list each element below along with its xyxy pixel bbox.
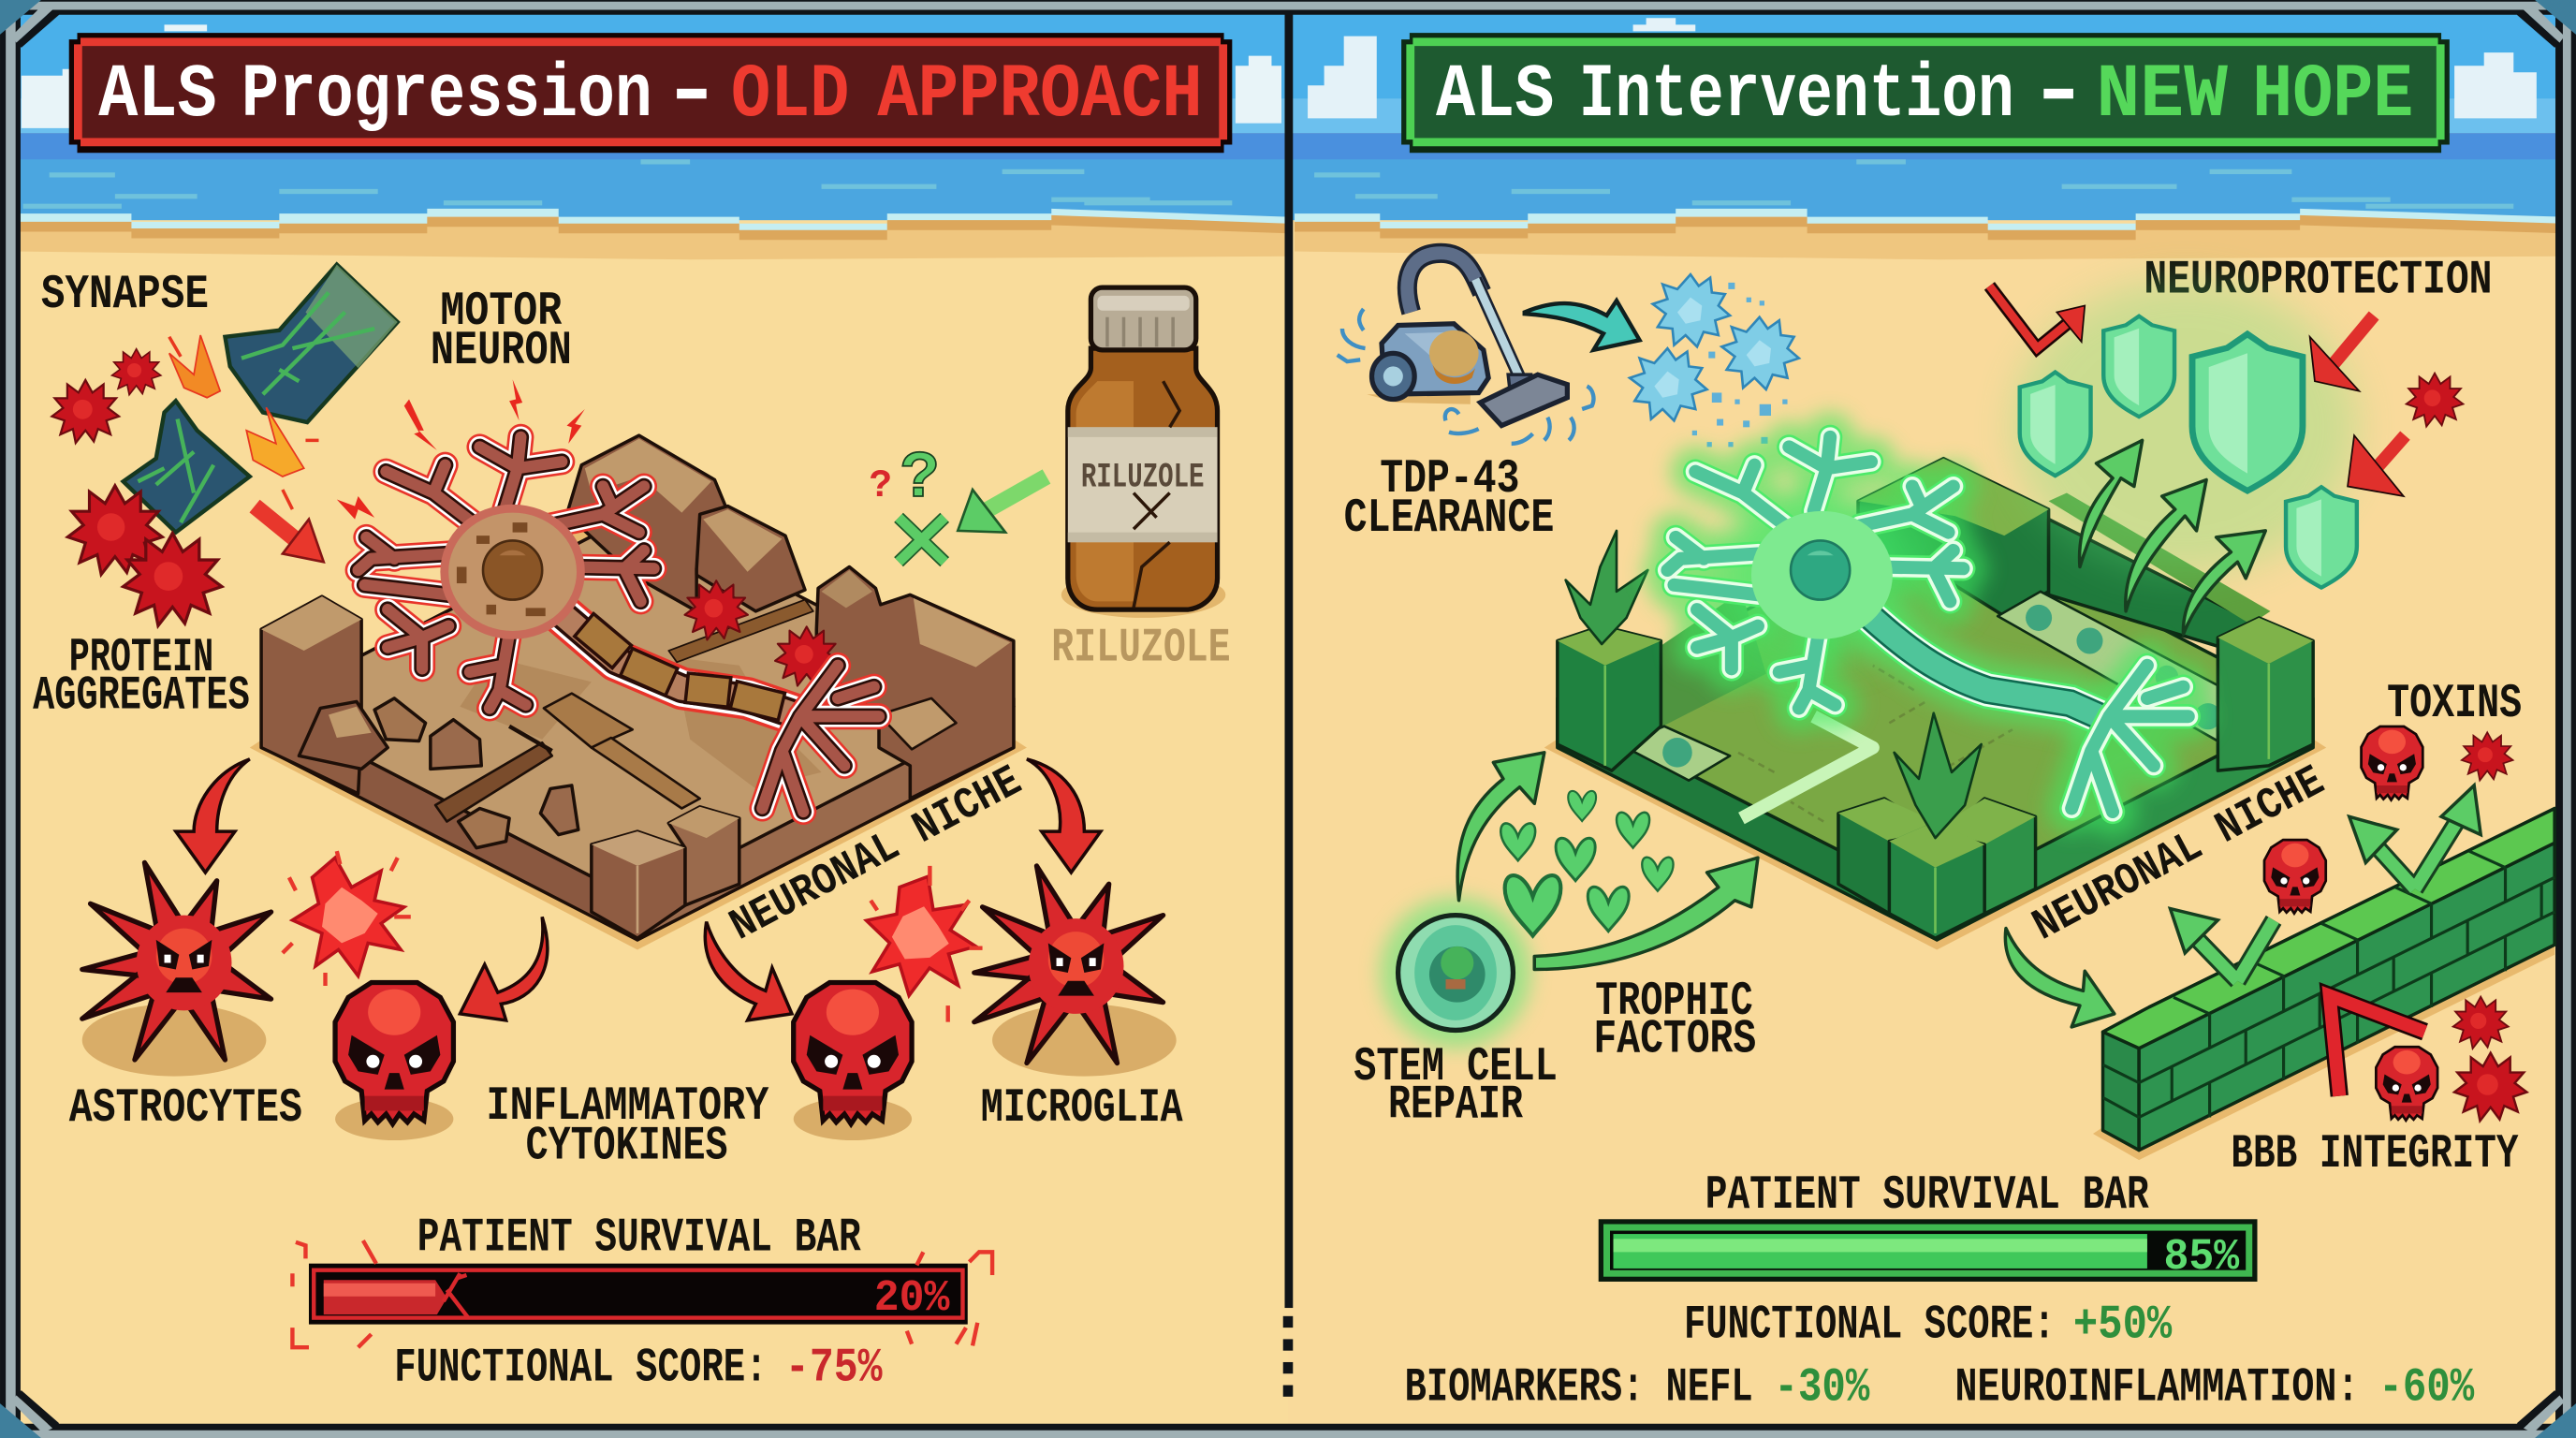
label: biomarkers NEFL: BIOMARKERS: NEFL bbox=[1405, 1361, 1753, 1415]
icon: stem cell bbox=[1380, 897, 1531, 1049]
icon: protein aggregates bbox=[51, 349, 222, 625]
label: stem cell repair bbox=[1354, 1041, 1558, 1132]
arrow: vacuum to TDP-43 bbox=[1525, 301, 1640, 350]
title: ALS Progression - OLD APPROACH: OLD bbox=[731, 53, 849, 139]
label: left survival bar heading: PATIENT SURVIVAL BAR bbox=[417, 1212, 861, 1266]
label: stem cell repair: STEM CELL bbox=[1354, 1041, 1558, 1094]
panel: new hope beach background bbox=[1288, 13, 2563, 1426]
icon: isometric damaged neuronal niche bbox=[250, 435, 1027, 949]
icon: trophic factor hearts bbox=[1500, 791, 1674, 936]
label: motor neuron: MOTOR bbox=[440, 286, 563, 339]
label: functional score plus 50: +50% bbox=[2073, 1299, 2173, 1353]
icon: damaged motor neuron bbox=[359, 437, 879, 812]
icon: microglia bbox=[974, 866, 1177, 1077]
title: ALS Intervention - NEW HOPE: HOPE bbox=[2252, 53, 2413, 139]
label: inflammatory cytokines bbox=[487, 1080, 769, 1173]
icon: protective shields bbox=[2012, 279, 2358, 588]
title: ALS Progression - OLD APPROACH bbox=[69, 33, 1232, 153]
label: protein aggregates: PROTEIN bbox=[69, 632, 213, 685]
label: trophic factors: TROPHIC bbox=[1595, 976, 1753, 1029]
label: motor neuron bbox=[431, 286, 572, 378]
chart: patient survival bar 20% bbox=[292, 1240, 992, 1347]
arrow: niche to BBB wall bbox=[2005, 929, 2115, 1027]
neuronal niche label right: NEURONAL NICHE bbox=[2026, 757, 2333, 952]
label: protein aggregates bbox=[33, 632, 250, 723]
icon: riluzole bottle: RILUZOLE bbox=[1081, 459, 1204, 498]
chart: patient survival bar 20%: 20% bbox=[874, 1274, 950, 1324]
icon: astrocyte bbox=[82, 862, 271, 1077]
label: biomarkers NEFL: -30% bbox=[1775, 1361, 1870, 1415]
label: neuroprotection: NEUROPROTECTION bbox=[2144, 254, 2492, 307]
icon: TDP-43 aggregates dissolving bbox=[1630, 274, 1799, 447]
title: ALS Intervention - NEW HOPE: Intervention bbox=[1579, 53, 2014, 139]
icon: plants bbox=[1566, 531, 1982, 838]
icon: toxin skulls and aggregates bbox=[2264, 726, 2526, 1121]
arrow: synapse to neuron bbox=[255, 506, 324, 562]
label: functional score minus 75: FUNCTIONAL SCORE: bbox=[394, 1342, 768, 1395]
icon: vacuum cleaner bbox=[1338, 253, 1593, 444]
label: microglia: MICROGLIA bbox=[981, 1082, 1183, 1136]
icon: failed target question marks and X: ? bbox=[869, 463, 892, 508]
icon: left skull bbox=[335, 983, 453, 1140]
panel: old approach beach background bbox=[13, 13, 1288, 1426]
icon: damaged synapse chips bbox=[124, 265, 398, 533]
label: functional score minus 75: -75% bbox=[785, 1342, 883, 1395]
icon: sparks between chips bbox=[169, 335, 318, 509]
icon: riluzole bottle bbox=[1061, 287, 1225, 618]
label: trophic factors bbox=[1593, 976, 1756, 1066]
title: ALS Progression - OLD APPROACH: ALS bbox=[98, 53, 217, 139]
icon: blood brain barrier wall bbox=[2093, 809, 2554, 1160]
label: functional score plus 50: FUNCTIONAL SCORE: bbox=[1684, 1299, 2056, 1353]
label: neuroinflammation: NEUROINFLAMMATION: bbox=[1955, 1361, 2359, 1415]
arrow: stem cell to niche bbox=[1457, 753, 1544, 901]
arrow: niche to left skull bbox=[460, 917, 548, 1020]
arrow: niche to astrocytes bbox=[176, 759, 250, 873]
label: trophic factors: FACTORS bbox=[1593, 1013, 1756, 1066]
label: TDP-43 clearance: TDP-43 bbox=[1380, 453, 1519, 506]
chart: patient survival bar 85%: 85% bbox=[2163, 1233, 2240, 1283]
title: ALS Intervention - NEW HOPE bbox=[1401, 33, 2450, 153]
label: neuroinflammation: -60% bbox=[2378, 1361, 2475, 1415]
icon: failed target question marks and X: ? bbox=[900, 443, 940, 517]
arrows: red threats deflected bbox=[1989, 286, 2463, 496]
icon: glowing healthy neuron bbox=[1667, 437, 2188, 812]
arrow: niche to microglia bbox=[1027, 759, 1101, 873]
arrow: niche to right skull bbox=[705, 922, 792, 1020]
arrow: riluzole to failed target bbox=[958, 477, 1046, 533]
label: astrocytes: ASTROCYTES bbox=[69, 1082, 302, 1136]
title: ALS Progression - OLD APPROACH: APPROACH bbox=[877, 53, 1203, 139]
icon: failed target question marks and X bbox=[869, 443, 944, 562]
icon: left cytokine burst bbox=[283, 851, 411, 986]
chart: patient survival bar 85% bbox=[1599, 1219, 2258, 1283]
arrow: trophic factors to niche bbox=[1534, 858, 1758, 970]
label: motor neuron: NEURON bbox=[431, 325, 572, 378]
arrows: green rising through niche bbox=[2080, 440, 2265, 634]
title: ALS Intervention - NEW HOPE: NEW bbox=[2097, 53, 2228, 139]
arrow: red toxin blocked bbox=[2330, 996, 2425, 1096]
label: stem cell repair: REPAIR bbox=[1388, 1078, 1523, 1132]
arrows: wall deflecting up bbox=[2170, 785, 2481, 981]
icon: right cytokine burst bbox=[847, 862, 993, 1022]
label: TDP-43 clearance: CLEARANCE bbox=[1344, 492, 1554, 546]
title: ALS Progression - OLD APPROACH: Progression bbox=[242, 53, 652, 139]
label: inflammatory cytokines: CYTOKINES bbox=[526, 1120, 728, 1173]
label: protein aggregates: AGGREGATES bbox=[33, 669, 250, 723]
label: TDP-43 clearance bbox=[1344, 453, 1554, 546]
icon: red pain sparks bbox=[337, 379, 585, 520]
title: ALS Intervention - NEW HOPE: ALS bbox=[1436, 53, 1554, 139]
label: synapse: SYNAPSE bbox=[41, 269, 209, 322]
center divider bbox=[1283, 13, 1293, 1397]
label: inflammatory cytokines: INFLAMMATORY bbox=[487, 1080, 769, 1134]
label: right survival bar heading: PATIENT SURVIVAL BAR bbox=[1705, 1169, 2149, 1223]
label: riluzole: RILUZOLE bbox=[1051, 623, 1231, 676]
icon: isometric restored neuronal niche bbox=[1544, 459, 2326, 949]
label: toxins: TOXINS bbox=[2387, 678, 2522, 731]
icon: right skull bbox=[794, 983, 912, 1140]
neuronal niche label left: NEURONAL NICHE bbox=[723, 757, 1031, 952]
